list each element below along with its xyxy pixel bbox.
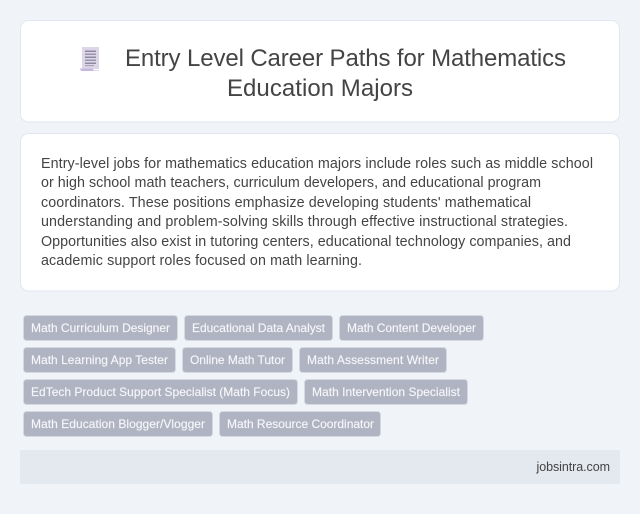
footer text: source: jobsintra.com <box>536 460 610 474</box>
tag: Educational Data Analyst <box>184 316 332 340</box>
tag: Math Intervention Specialist: Math Intervention Specialist <box>312 385 461 399</box>
title text: Education Majors <box>227 75 413 102</box>
tag: Math Intervention Specialist <box>304 380 468 404</box>
tag: Math Resource Coordinator <box>220 412 380 436</box>
tag: Math Resource Coordinator: Math Resource Coordinator <box>227 417 374 431</box>
tag: Math Content Developer <box>340 316 484 340</box>
tag: Math Curriculum Designer <box>24 316 178 340</box>
panel: description <box>20 134 620 291</box>
tag list: job titles <box>24 316 484 436</box>
tag: Online Math Tutor: Online Math Tutor <box>190 353 285 367</box>
description text: understanding and problem-solving skills through effective instructional strategies. <box>41 214 568 230</box>
tag: Math Learning App Tester: Math Learning App Tester <box>31 353 168 367</box>
tag: Math Assessment Writer: Math Assessment Writer <box>307 353 439 367</box>
tag: Math Content Developer: Math Content Developer <box>347 321 476 335</box>
description text: Opportunities also exist in tutoring centers, educational technology companies, and <box>41 234 571 250</box>
description text: Entry-level jobs for mathematics education majors include roles such as middle school <box>41 156 593 172</box>
tag: EdTech Product Support Specialist (Math Focus): EdTech Product Support Specialist (Math Focus) <box>31 385 290 399</box>
tag: Math Assessment Writer <box>300 348 446 372</box>
tag: EdTech Product Support Specialist (Math Focus) <box>24 380 298 404</box>
panel: title card <box>20 20 620 122</box>
description text: coordinators. These positions emphasize developing students' mathematical <box>41 195 531 211</box>
tag: Math Learning App Tester <box>24 348 176 372</box>
footer bar <box>20 450 620 484</box>
tag: Math Education Blogger/Vlogger <box>24 412 212 436</box>
tag: Educational Data Analyst: Educational Data Analyst <box>192 321 326 335</box>
description text <box>41 156 593 269</box>
tag: Online Math Tutor <box>182 348 292 372</box>
title text: Entry Level Career Paths for Mathematics <box>125 45 566 72</box>
title text <box>125 45 566 102</box>
tag: Math Curriculum Designer: Math Curriculum Designer <box>31 321 170 335</box>
description text: or high school math teachers, curriculum developers, and educational program <box>41 175 541 191</box>
icon: document scroll <box>80 47 99 71</box>
tag: Math Education Blogger/Vlogger: Math Education Blogger/Vlogger <box>31 417 205 431</box>
description text: academic support roles focused on math learning. <box>41 253 362 269</box>
